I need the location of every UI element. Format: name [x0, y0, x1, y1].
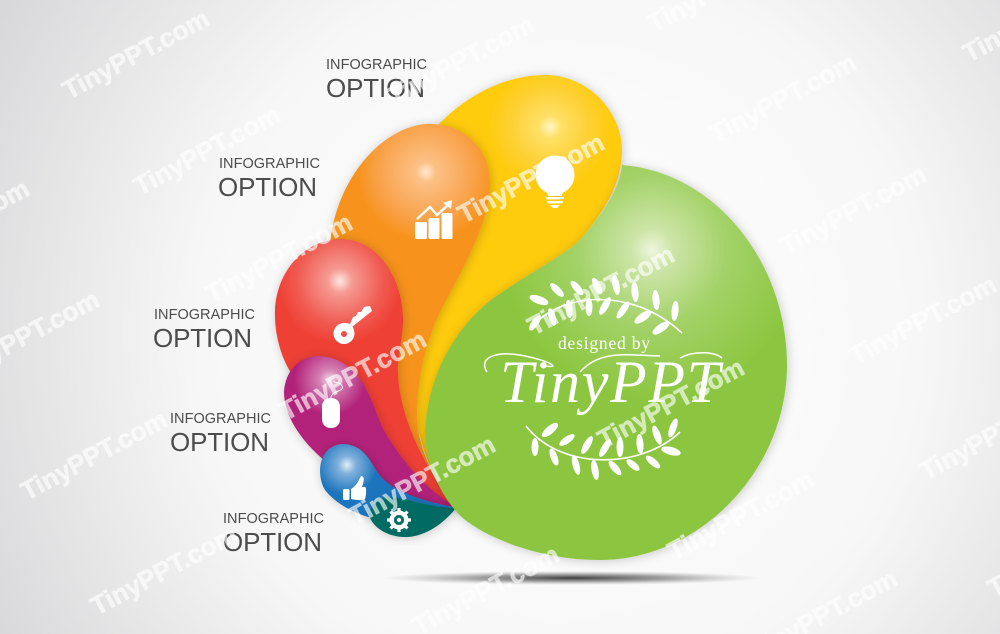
icon: key — [334, 306, 372, 344]
watermarks: TinyPPT.com — [704, 47, 861, 149]
label: option 5 — [223, 511, 324, 557]
petal: teal — [369, 497, 456, 537]
TinyPPT script: TinyPPT — [500, 349, 724, 415]
watermarks: TinyPPT.com — [592, 352, 749, 454]
icon: gear — [387, 508, 411, 532]
watermarks: TinyPPT.com — [128, 99, 285, 201]
label: option 5: INFOGRAPHIC — [223, 511, 324, 527]
label: option 1 — [326, 57, 427, 103]
label: option 1: OPTION — [326, 73, 425, 103]
watermarks: TinyPPT.com — [15, 404, 172, 506]
bottom wreath — [526, 417, 682, 480]
label: option 2: OPTION — [218, 172, 317, 202]
watermarks: TinyPPT.com — [343, 429, 500, 531]
label: option 4: INFOGRAPHIC — [170, 411, 271, 427]
green circle — [425, 165, 787, 560]
label: option 4 — [170, 411, 271, 457]
label: option 5: OPTION — [223, 527, 322, 557]
petal: magenta — [284, 356, 458, 508]
petal: red — [275, 239, 458, 508]
label: option 2: INFOGRAPHIC — [219, 156, 320, 172]
icon: thumbs up — [343, 476, 366, 500]
icon: growth chart — [415, 200, 452, 239]
icon: mouse — [322, 381, 342, 428]
watermarks: TinyPPT.com — [452, 127, 609, 229]
designed by: designed by — [558, 333, 650, 353]
watermarks: TinyPPT.com — [274, 324, 431, 426]
labels — [153, 57, 427, 557]
petal: orange — [329, 124, 490, 508]
petal: yellow — [413, 75, 622, 510]
label: option 1: INFOGRAPHIC — [326, 57, 427, 73]
label: option 3 — [153, 307, 255, 353]
label: option 2 — [218, 156, 320, 202]
diagram: petals — [275, 75, 787, 560]
watermarks: TinyPPT.com — [85, 519, 242, 621]
watermarks: TinyPPT.com — [522, 239, 679, 341]
label: option 3: INFOGRAPHIC — [154, 307, 255, 323]
floor shadow — [382, 571, 762, 585]
label: option 4: OPTION — [170, 427, 269, 457]
top wreath — [527, 275, 682, 337]
watermarks: TinyPPT.com — [57, 3, 214, 105]
watermarks: TinyPPT.com — [662, 464, 819, 566]
watermarks: TinyPPT.com — [382, 9, 539, 111]
watermarks: TinyPPT.com — [774, 159, 931, 261]
petal: blue — [320, 444, 458, 520]
watermarks: TinyPPT.com — [200, 207, 357, 309]
watermarks: TinyPPT.com — [844, 269, 1000, 371]
icon: light bulb — [536, 156, 574, 208]
label: option 3: OPTION — [153, 323, 252, 353]
logo: wreath and TinyPPT — [485, 275, 724, 480]
